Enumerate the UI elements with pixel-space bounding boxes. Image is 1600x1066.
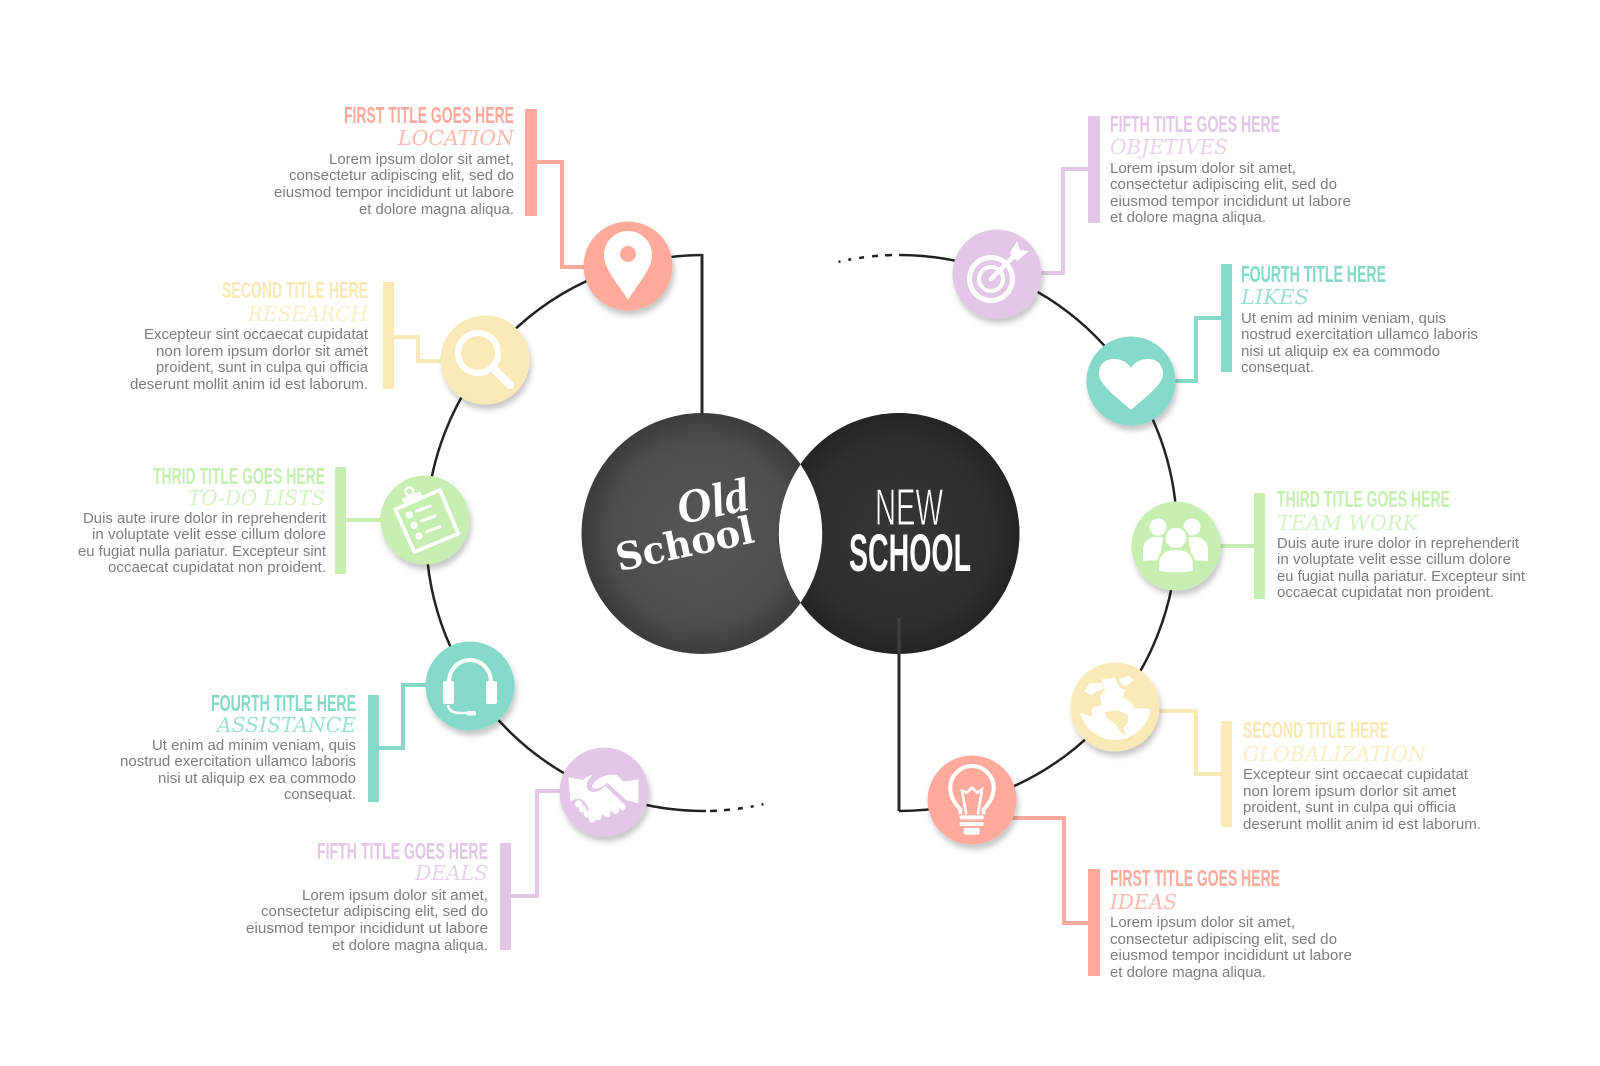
body: proident, sunt in culpa qui officia — [1243, 800, 1457, 816]
title: FIFTH TITLE GOES HERE — [1110, 111, 1280, 137]
body: eu fugiat nulla pariatur. Excepteur sint — [1277, 569, 1525, 585]
body: Lorem ipsum dolor sit amet, — [1110, 915, 1295, 931]
body: Lorem ipsum dolor sit amet, — [329, 152, 514, 168]
body — [78, 511, 326, 576]
body: nostrud exercitation ullamco laboris — [120, 754, 356, 770]
body: in voluptate velit esse cillum dolore — [1277, 552, 1511, 568]
title: SECOND TITLE HERE — [222, 277, 368, 303]
icon: location pin — [584, 222, 672, 310]
venn circles — [582, 413, 1020, 654]
body: et dolore magna aliqua. — [1110, 965, 1266, 981]
body: in voluptate velit esse cillum dolore — [92, 527, 326, 543]
bracket — [335, 467, 385, 574]
body: nisi ut aliquip ex ea commodo — [1241, 344, 1440, 360]
body: Ut enim ad minim veniam, quis — [152, 738, 356, 754]
old school logo text — [603, 468, 761, 580]
title: SECOND TITLE HERE — [1243, 717, 1389, 743]
body: eiusmod tempor incididunt ut labore — [1110, 194, 1351, 210]
body — [246, 888, 488, 954]
title: FIRST TITLE GOES HERE — [1110, 865, 1280, 891]
body: eu fugiat nulla pariatur. Excepteur sint — [78, 544, 326, 560]
left ring dashed fade — [710, 804, 764, 811]
title: THIRD TITLE GOES HERE — [1277, 486, 1450, 512]
body: proident, sunt in culpa qui officia — [156, 360, 369, 376]
body: deserunt mollit anim id est laborum. — [1243, 817, 1481, 833]
icon: heart — [1086, 336, 1176, 426]
new school text: NEW — [875, 479, 943, 537]
subtitle: ASSISTANCE — [215, 713, 356, 737]
icon: people — [1132, 502, 1220, 590]
body: consequat. — [284, 787, 356, 803]
stem from new school circle — [898, 618, 900, 811]
body: Lorem ipsum dolor sit amet, — [1110, 161, 1296, 177]
block: first location — [274, 102, 590, 267]
icon: handshake — [560, 748, 648, 836]
body — [120, 738, 356, 803]
body — [1110, 161, 1351, 226]
circle: old school — [582, 413, 822, 654]
body: Duis aute irure dolor in reprehenderit — [83, 511, 326, 527]
icon: headset — [426, 642, 514, 730]
subtitle: OBJETIVES — [1110, 135, 1228, 159]
old school logo text: School — [611, 507, 758, 580]
subtitle: TEAM WORK — [1277, 511, 1420, 535]
body: et dolore magna aliqua. — [332, 938, 488, 954]
icon: light bulb — [928, 756, 1016, 844]
body: eiusmod tempor incididunt ut labore — [274, 185, 514, 201]
body: consectetur adipiscing elit, sed do — [261, 904, 488, 920]
body: eiusmod tempor incididunt ut labore — [1110, 948, 1352, 964]
body — [1241, 311, 1478, 376]
body: consectetur adipiscing elit, sed do — [289, 168, 514, 184]
bracket — [1210, 493, 1265, 599]
circle: new school — [778, 413, 1020, 654]
icon: magnifier — [440, 316, 530, 404]
bracket — [1030, 116, 1100, 273]
body: deserunt mollit anim id est laborum. — [130, 377, 368, 393]
body: consequat. — [1241, 360, 1314, 376]
block: fourth assistance — [120, 685, 430, 803]
bracket — [525, 109, 590, 267]
new school text: SCHOOL — [849, 524, 971, 583]
right ring arc — [899, 255, 1177, 811]
body: Excepteur sint occaecat cupidatat — [1243, 767, 1468, 783]
block: third team work — [1210, 486, 1525, 601]
body: nostrud exercitation ullamco laboris — [1241, 327, 1478, 343]
stem from old school circle — [700, 254, 704, 415]
body — [130, 327, 369, 393]
body: Ut enim ad minim veniam, quis — [1241, 311, 1446, 327]
body: occaecat cupidatat non proident. — [108, 560, 326, 576]
body: et dolore magna aliqua. — [1110, 210, 1266, 226]
body: non lorem ipsum dorlor sit amet — [1243, 784, 1456, 800]
bracket — [1170, 264, 1232, 381]
block: fifth objetives — [1030, 111, 1351, 273]
left ring arc — [426, 255, 706, 811]
block: second research — [130, 277, 450, 393]
body: Lorem ipsum dolor sit amet, — [302, 888, 488, 904]
body: Excepteur sint occaecat cupidatat — [144, 327, 368, 343]
block: second globalization — [1155, 711, 1481, 833]
body: eiusmod tempor incididunt ut labore — [246, 921, 488, 937]
body — [1243, 767, 1481, 833]
body: non lorem ipsum dorlor sit amet — [156, 344, 368, 360]
body: occaecat cupidatat non proident. — [1277, 585, 1494, 601]
bracket — [1155, 711, 1232, 827]
old school logo text: Old — [672, 468, 754, 535]
title: FOURTH TITLE HERE — [211, 690, 356, 716]
icon: globe — [1070, 662, 1160, 752]
block: third to-do lists — [78, 463, 385, 576]
body: consectetur adipiscing elit, sed do — [1110, 177, 1337, 193]
bracket — [368, 685, 430, 802]
bracket — [383, 282, 450, 389]
body — [1277, 536, 1525, 601]
body: Duis aute irure dolor in reprehenderit — [1277, 536, 1519, 552]
icon: target — [952, 230, 1042, 318]
block: fourth likes — [1170, 261, 1478, 381]
subtitle: TO-DO LISTS — [188, 486, 325, 510]
block: first ideas — [1010, 818, 1352, 981]
title: FIFTH TITLE GOES HERE — [317, 838, 488, 864]
subtitle: IDEAS — [1109, 890, 1177, 914]
title: FIRST TITLE GOES HERE — [344, 102, 514, 128]
body: nisi ut aliquip ex ea commodo — [158, 771, 356, 787]
subtitle: LIKES — [1240, 285, 1309, 309]
body — [274, 152, 514, 218]
body: consectetur adipiscing elit, sed do — [1110, 932, 1337, 948]
title: FOURTH TITLE HERE — [1241, 261, 1386, 287]
icon: clipboard — [380, 476, 470, 564]
white overlap lens — [779, 464, 822, 602]
subtitle: LOCATION — [397, 126, 515, 150]
title: THRID TITLE GOES HERE — [153, 463, 325, 489]
block: fifth deals — [246, 791, 565, 954]
right ring dashed fade — [838, 255, 892, 262]
subtitle: DEALS — [414, 861, 488, 885]
body: et dolore magna aliqua. — [359, 202, 514, 218]
bracket — [500, 791, 565, 950]
subtitle: GLOBALIZATION — [1243, 742, 1427, 766]
bracket — [1010, 818, 1100, 976]
body — [1110, 915, 1352, 981]
subtitle: RESEARCH — [247, 302, 369, 326]
new school text — [849, 479, 971, 583]
